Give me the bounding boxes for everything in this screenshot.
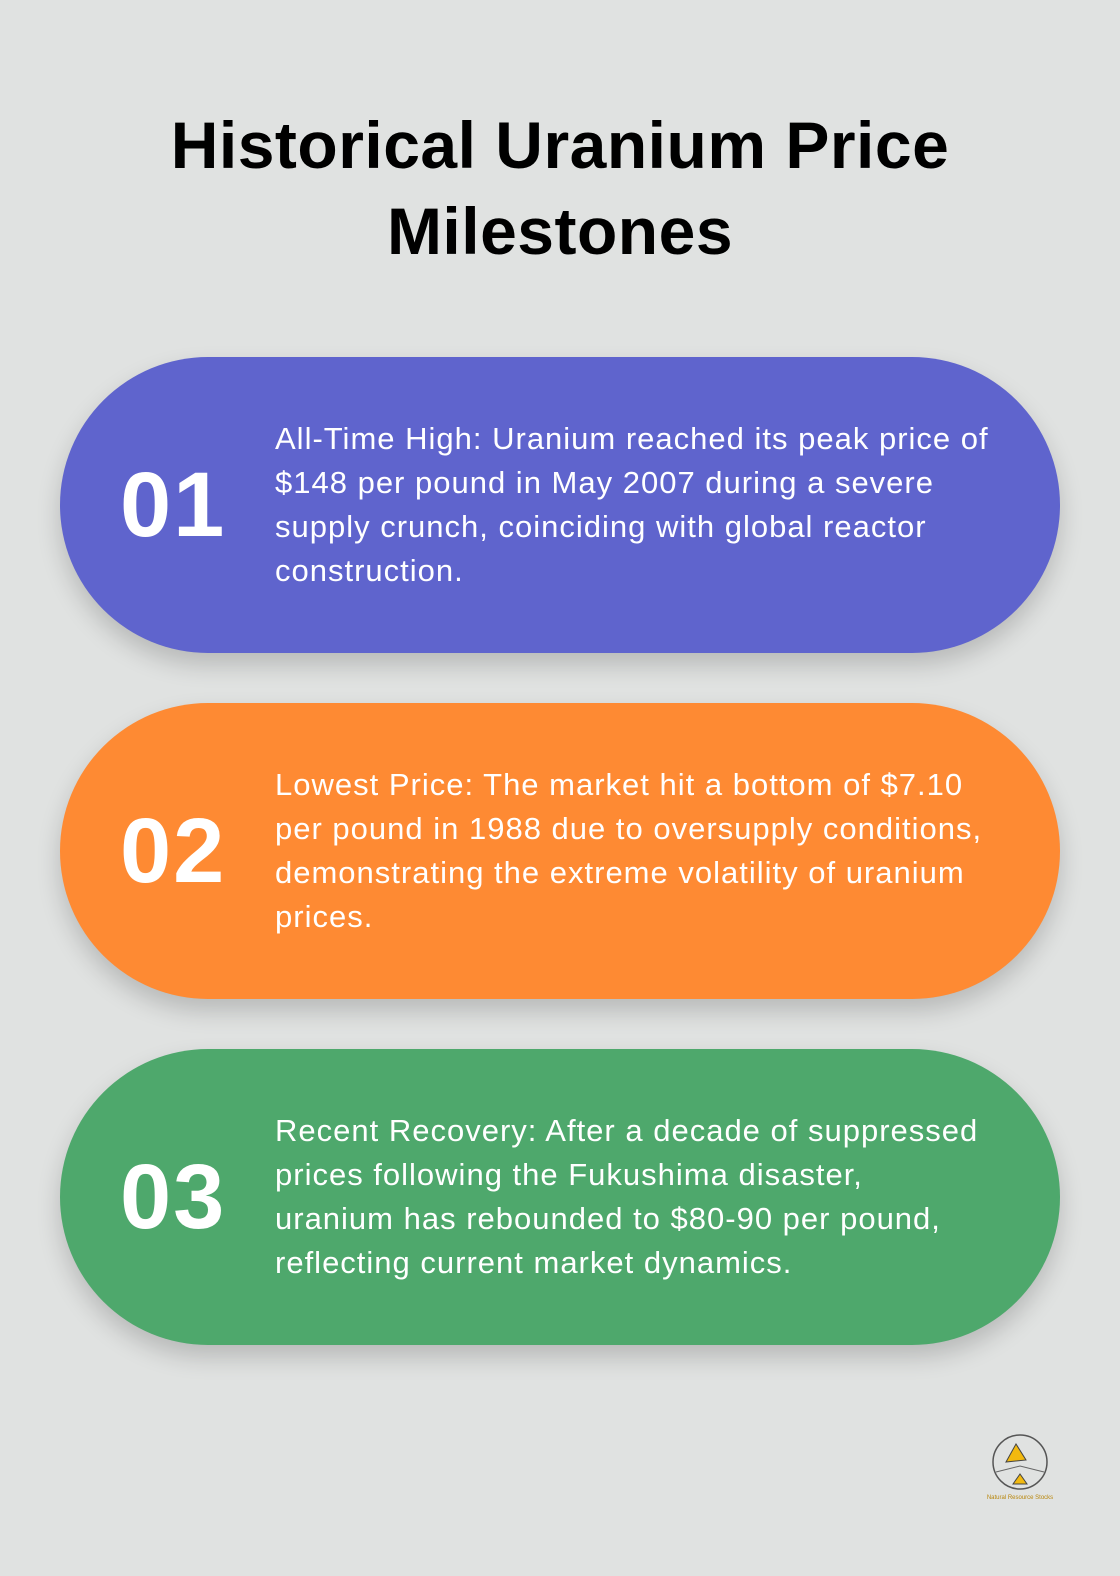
panel: milestone 03 [60,1049,1060,1345]
title [171,108,949,268]
text 03: Recent Recovery: After a decade of suppressed [275,1113,978,1148]
logo: Natural Resource Stocks [987,1495,1053,1501]
text 02: demonstrating the extreme volatility of uranium [275,855,965,890]
number 01: 01 [120,454,226,556]
number 03: 03 [120,1146,226,1248]
text 03: prices following the Fukushima disaster, [275,1157,863,1192]
panel: milestone 02 [60,703,1060,999]
text 03 [275,1113,978,1280]
text 01: $148 per pound in May 2007 during a severe [275,465,934,500]
number 02: 02 [120,800,226,902]
text 01 [275,421,989,588]
text 02: Lowest Price: The market hit a bottom of $7.10 [275,767,963,802]
text 03: reflecting current market dynamics. [275,1245,792,1280]
text 01: construction. [275,553,464,588]
text 01: All-Time High: Uranium reached its peak price of [275,421,989,456]
text 02 [275,767,982,934]
text 02: prices. [275,899,373,934]
text 01: supply crunch, coinciding with global reactor [275,509,927,544]
title: Milestones [387,194,733,268]
text 03: uranium has rebounded to $80-90 per pound, [275,1201,941,1236]
logo [987,1434,1053,1501]
title: Historical Uranium Price [171,108,949,182]
panel: milestone 01 [60,357,1060,653]
text 02: per pound in 1988 due to oversupply conditions, [275,811,982,846]
